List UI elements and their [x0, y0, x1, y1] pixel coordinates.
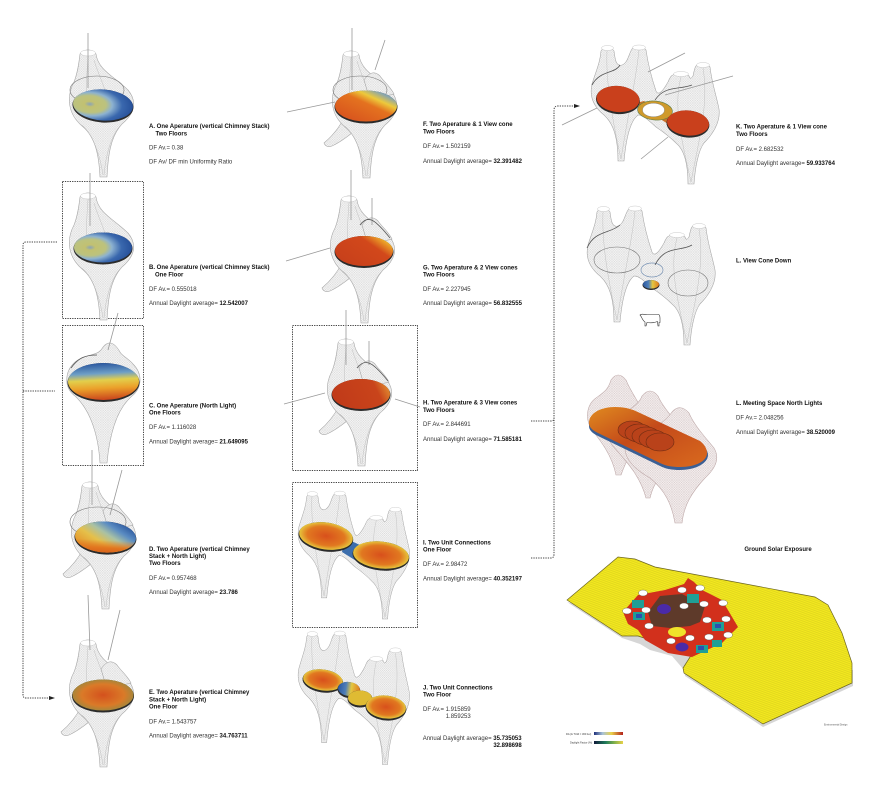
- hull front: [625, 408, 717, 523]
- rays G: [286, 170, 372, 261]
- label D: Annual Daylight average= 23.786: [149, 590, 239, 596]
- label F: DF Av.= 1.502159: [423, 144, 471, 150]
- tower D: [103, 504, 133, 531]
- label E: Stack + North Light): [149, 698, 206, 704]
- study L meeting space: [587, 375, 717, 523]
- floor B: [74, 232, 132, 264]
- floor K right: [665, 109, 711, 139]
- side stem H: [319, 406, 358, 435]
- label A: DF Av.= 0.38: [149, 146, 184, 152]
- label J: Annual Daylight average= 35.735053: [423, 736, 522, 742]
- label H: DF Av.= 2.844691: [423, 422, 471, 428]
- frame: C: [62, 326, 144, 466]
- connector floor K: [636, 100, 674, 124]
- twin hull K: [591, 45, 719, 184]
- floor G: [334, 236, 394, 268]
- rays D: [92, 450, 122, 515]
- label B: B. One Aperature (vertical Chimney Stack): [149, 265, 269, 271]
- hull G: [330, 196, 395, 323]
- floor J mid: [336, 680, 361, 700]
- heading: ground solar exposure: Ground Solar Exposure: [744, 547, 812, 553]
- hull D: [71, 482, 136, 609]
- floor J left: [301, 667, 345, 695]
- label D: D. Two Aperature (vertical Chimney: [149, 547, 250, 553]
- ground plane: [567, 557, 852, 724]
- floor C: [68, 363, 140, 402]
- side stem G: [322, 263, 361, 292]
- label J: DF Av.= 1.915859: [423, 707, 471, 713]
- label L meeting space: [736, 401, 836, 436]
- chimney ray B: [89, 173, 91, 226]
- label D: [149, 547, 250, 596]
- side stem E: [61, 707, 100, 736]
- solar exposure map: [566, 557, 853, 744]
- label L meeting space: DF Av.= 2.048256: [736, 416, 784, 422]
- label I: [423, 540, 523, 582]
- floor J mid 2: [348, 690, 372, 708]
- floor K left: [595, 84, 641, 116]
- bridge I: [342, 538, 362, 562]
- twin hull J: [298, 631, 410, 764]
- small floor L: [642, 280, 660, 290]
- label C: C. One Aperature (North Light): [149, 404, 236, 410]
- floor I left: [297, 519, 355, 555]
- label C: One Floors: [149, 411, 181, 417]
- label B: Annual Daylight average= 12.542007: [149, 301, 249, 307]
- label J: Two Floor: [423, 692, 452, 698]
- floor D: [74, 520, 137, 556]
- study G: [286, 170, 395, 323]
- rays E: [88, 595, 120, 660]
- study C: [67, 313, 140, 463]
- label G: Two Floors: [423, 272, 455, 278]
- dark ring C: [71, 355, 97, 368]
- legend: Daylight Factor (%): [570, 740, 592, 744]
- hull rear: [587, 375, 648, 475]
- tower H: [359, 361, 389, 388]
- shingled floors: [618, 421, 674, 451]
- capsule floor rim: [589, 408, 708, 470]
- label E: DF Av.= 1.543757: [149, 720, 197, 726]
- capsule floor: [589, 407, 707, 467]
- tower F: [364, 73, 394, 100]
- label K: DF Av.= 2.682532: [736, 147, 784, 153]
- connector: right bracket: [531, 106, 579, 558]
- label E: [149, 690, 250, 740]
- connector: left branch: [23, 390, 55, 392]
- dark ridge K: [592, 65, 692, 100]
- hull E: [69, 640, 134, 767]
- label H: H. Two Aperature & 3 View cones: [423, 401, 518, 407]
- study D: [63, 450, 137, 609]
- label A: A. One Aperature (vertical Chimney Stack): [149, 124, 269, 130]
- study K: [562, 45, 733, 184]
- label K: Annual Daylight average= 59.933764: [736, 161, 836, 167]
- label G: DF Av.= 2.227945: [423, 287, 471, 293]
- ring A: [70, 76, 124, 104]
- label G: [423, 265, 523, 307]
- label J: [423, 685, 522, 749]
- hull H: [327, 339, 392, 466]
- label J: 1.859253: [446, 714, 471, 720]
- legend: DA (& TUdI = 300 lux): [566, 732, 591, 736]
- twin hull L: [587, 206, 715, 345]
- study A: [69, 33, 135, 177]
- ground shadow: [567, 602, 853, 727]
- label E: One Floor: [149, 704, 178, 710]
- software mark: Environmental Design: [824, 724, 848, 726]
- floor E: [72, 680, 134, 712]
- label A: Two Floors: [156, 131, 188, 137]
- dark ring G: [360, 219, 390, 238]
- legend: [566, 732, 623, 744]
- north light ray C: [108, 313, 118, 350]
- view rays K: [562, 53, 733, 159]
- floor A: [71, 87, 135, 125]
- icon: cow: [640, 314, 660, 326]
- chimney ray A: [87, 33, 89, 88]
- white oculi: [622, 585, 732, 644]
- label I: I. Two Unit Connections: [423, 540, 492, 546]
- label C: [149, 404, 249, 446]
- label I: One Floor: [423, 548, 452, 554]
- study I: [297, 491, 411, 619]
- floor J right: [364, 693, 408, 723]
- hull middle: [609, 391, 690, 498]
- label G: G. Two Aperature & 2 View cones: [423, 265, 518, 271]
- hull B: [69, 193, 134, 320]
- purple ellipses: [657, 604, 688, 652]
- label D: DF Av.= 0.957468: [149, 576, 197, 582]
- label J: 32.898698: [493, 743, 522, 749]
- label F: [423, 122, 523, 165]
- label I: Annual Daylight average= 40.352197: [423, 576, 523, 582]
- label F: Annual Daylight average= 32.391482: [423, 159, 523, 165]
- hull A: [69, 50, 134, 177]
- label B: [149, 265, 269, 307]
- dark ridge L: [587, 225, 692, 265]
- connector: right branch: [531, 418, 554, 421]
- label A: DF Av/ DF min Uniformity Ratio: [149, 160, 233, 166]
- study H: [284, 310, 420, 466]
- twin hull I: [298, 491, 410, 619]
- side stem F: [324, 118, 363, 147]
- label G: Annual Daylight average= 56.832555: [423, 301, 523, 307]
- label H: Two Floors: [423, 408, 455, 414]
- teal squares: [632, 594, 724, 653]
- rings L: [594, 247, 708, 296]
- label B: DF Av.= 0.555018: [149, 287, 197, 293]
- label H: [423, 401, 523, 443]
- brown centre: [648, 594, 705, 628]
- label F: Two Floors: [423, 130, 455, 136]
- study B: [69, 173, 134, 320]
- label L meeting space: L. Meeting Space North Lights: [736, 401, 823, 407]
- label L view cone: L. View Cone Down: [736, 259, 792, 265]
- side stem D: [63, 549, 102, 578]
- label I: DF Av.= 2.98472: [423, 562, 468, 568]
- blue squares: [636, 614, 721, 650]
- rays H: [284, 310, 420, 407]
- ring F: [333, 76, 387, 104]
- floor I right: [351, 539, 411, 573]
- label C: DF Av.= 1.116028: [149, 425, 197, 431]
- label J: J. Two Unit Connections: [423, 685, 493, 691]
- label E: E. Two Aperature (vertical Chimney: [149, 690, 250, 696]
- label B: One Floor: [155, 272, 184, 278]
- rays F: [287, 28, 385, 112]
- dark ring H: [357, 362, 388, 381]
- label L meeting space: Annual Daylight average= 38.520009: [736, 430, 836, 436]
- ring D: [70, 507, 126, 537]
- hull F: [332, 51, 397, 178]
- study J: [298, 631, 410, 764]
- study L view cone: [587, 206, 715, 345]
- label D: Stack + North Light): [149, 554, 206, 560]
- floor H: [332, 379, 390, 411]
- frame: B: [62, 182, 144, 318]
- study F: [287, 28, 398, 178]
- frame: H: [292, 326, 418, 470]
- label D: Two Floors: [149, 561, 181, 567]
- label K: [736, 125, 836, 167]
- label E: Annual Daylight average= 34.763711: [149, 734, 248, 740]
- frame: I: [292, 482, 418, 628]
- hull C: [67, 343, 140, 463]
- connector: left bracket: [23, 242, 57, 698]
- label C: Annual Daylight average= 21.649095: [149, 440, 249, 446]
- label K: K. Two Aperature & 1 View cone: [736, 125, 828, 131]
- red footprint: [623, 578, 738, 657]
- yellow courtyard: [668, 627, 686, 637]
- label H: Annual Daylight average= 71.585181: [423, 437, 523, 443]
- floor F: [334, 90, 398, 124]
- label K: Two Floors: [736, 132, 768, 138]
- tower G: [362, 218, 392, 245]
- study E: [61, 595, 134, 767]
- tower E: [101, 662, 131, 689]
- label F: F. Two Aperature & 1 View cone: [423, 122, 513, 128]
- label A: [149, 124, 269, 166]
